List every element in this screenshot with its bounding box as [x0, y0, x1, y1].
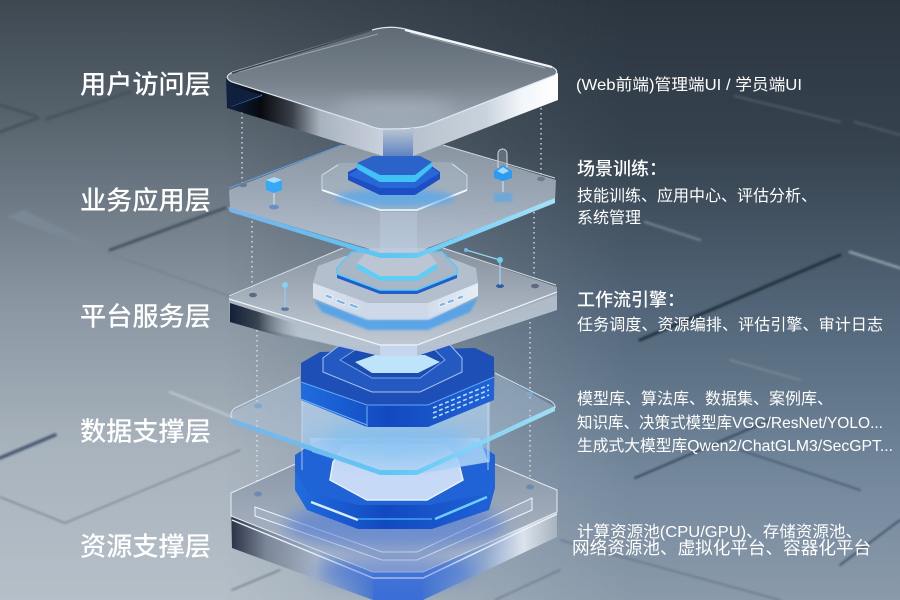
inner step: [255, 498, 532, 560]
plate side faces: [226, 78, 383, 156]
text: scenario training: 技能训练、应用中心、评估分析、: [577, 186, 817, 205]
layer 1: user access glass plate: [226, 27, 558, 156]
text: scenario training: 系统管理: [577, 209, 641, 227]
label: business application layer: 业务应用层: [80, 186, 211, 216]
labels: layer names: [80, 70, 211, 562]
layer 3: platform service glass plate: [229, 248, 557, 356]
layer 2: business application glass plate: [228, 145, 556, 258]
label: user access layer: 用户访问层: [80, 70, 211, 100]
stacked blue button: [348, 156, 440, 195]
platform service mini-server device: [313, 248, 478, 330]
icon: right blue cube with capsule: [494, 149, 512, 202]
base pins: [254, 492, 262, 496]
layer 4: data support glass plate: [231, 373, 555, 475]
text: data support detail: 生成式大模型库Qwen2/ChatGLM3/SecGPT...: [577, 437, 893, 455]
base top face: [231, 462, 557, 572]
text: data support detail: [577, 389, 893, 455]
plate top face: [227, 27, 557, 129]
text: workflow engine: 任务调度、资源编排、评估引擎、审计日志: [577, 316, 883, 334]
layer 5: resource base platform: [231, 462, 557, 600]
text: resource support detail: [572, 522, 871, 558]
light beam between core blocks: [302, 400, 490, 474]
icon: right sensor pin with wire: [464, 248, 503, 285]
inner hexagon outline: [322, 162, 467, 210]
label: platform service layer: 平台服务层: [80, 302, 211, 332]
icon: left sensor pin: [282, 282, 288, 308]
label: resource support layer: 资源支撑层: [80, 532, 211, 562]
text: scenario training: [577, 159, 817, 227]
text: data support detail: 模型库、算法库、数据集、案例库、: [577, 389, 833, 408]
base side faces: [231, 500, 373, 600]
text: resource support detail: 网络资源池、虚拟化平台、容器化平台: [572, 538, 871, 558]
text: user access detail: (Web前端)管理端UI / 学员端UI: [576, 76, 802, 94]
label: data support layer: 数据支撑层: [80, 416, 211, 446]
text: workflow engine: [577, 290, 883, 334]
lower blue octagon core: [295, 438, 495, 529]
upper blue octagon block: [301, 345, 494, 427]
server vent grid: [433, 385, 489, 418]
text: scenario training: 场景训练：: [577, 159, 667, 179]
icon: left blue cube: [266, 177, 282, 209]
descriptions: layer details: [572, 76, 893, 558]
text: workflow engine: 工作流引擎：: [577, 290, 685, 310]
text: data support detail: 知识库、决策式模型库VGG/ResNet/YOLO...: [577, 414, 883, 432]
text: resource support detail: 计算资源池(CPU/GPU)、存储资源池、: [577, 522, 862, 541]
guide lines: dotted connectors: [242, 108, 541, 494]
